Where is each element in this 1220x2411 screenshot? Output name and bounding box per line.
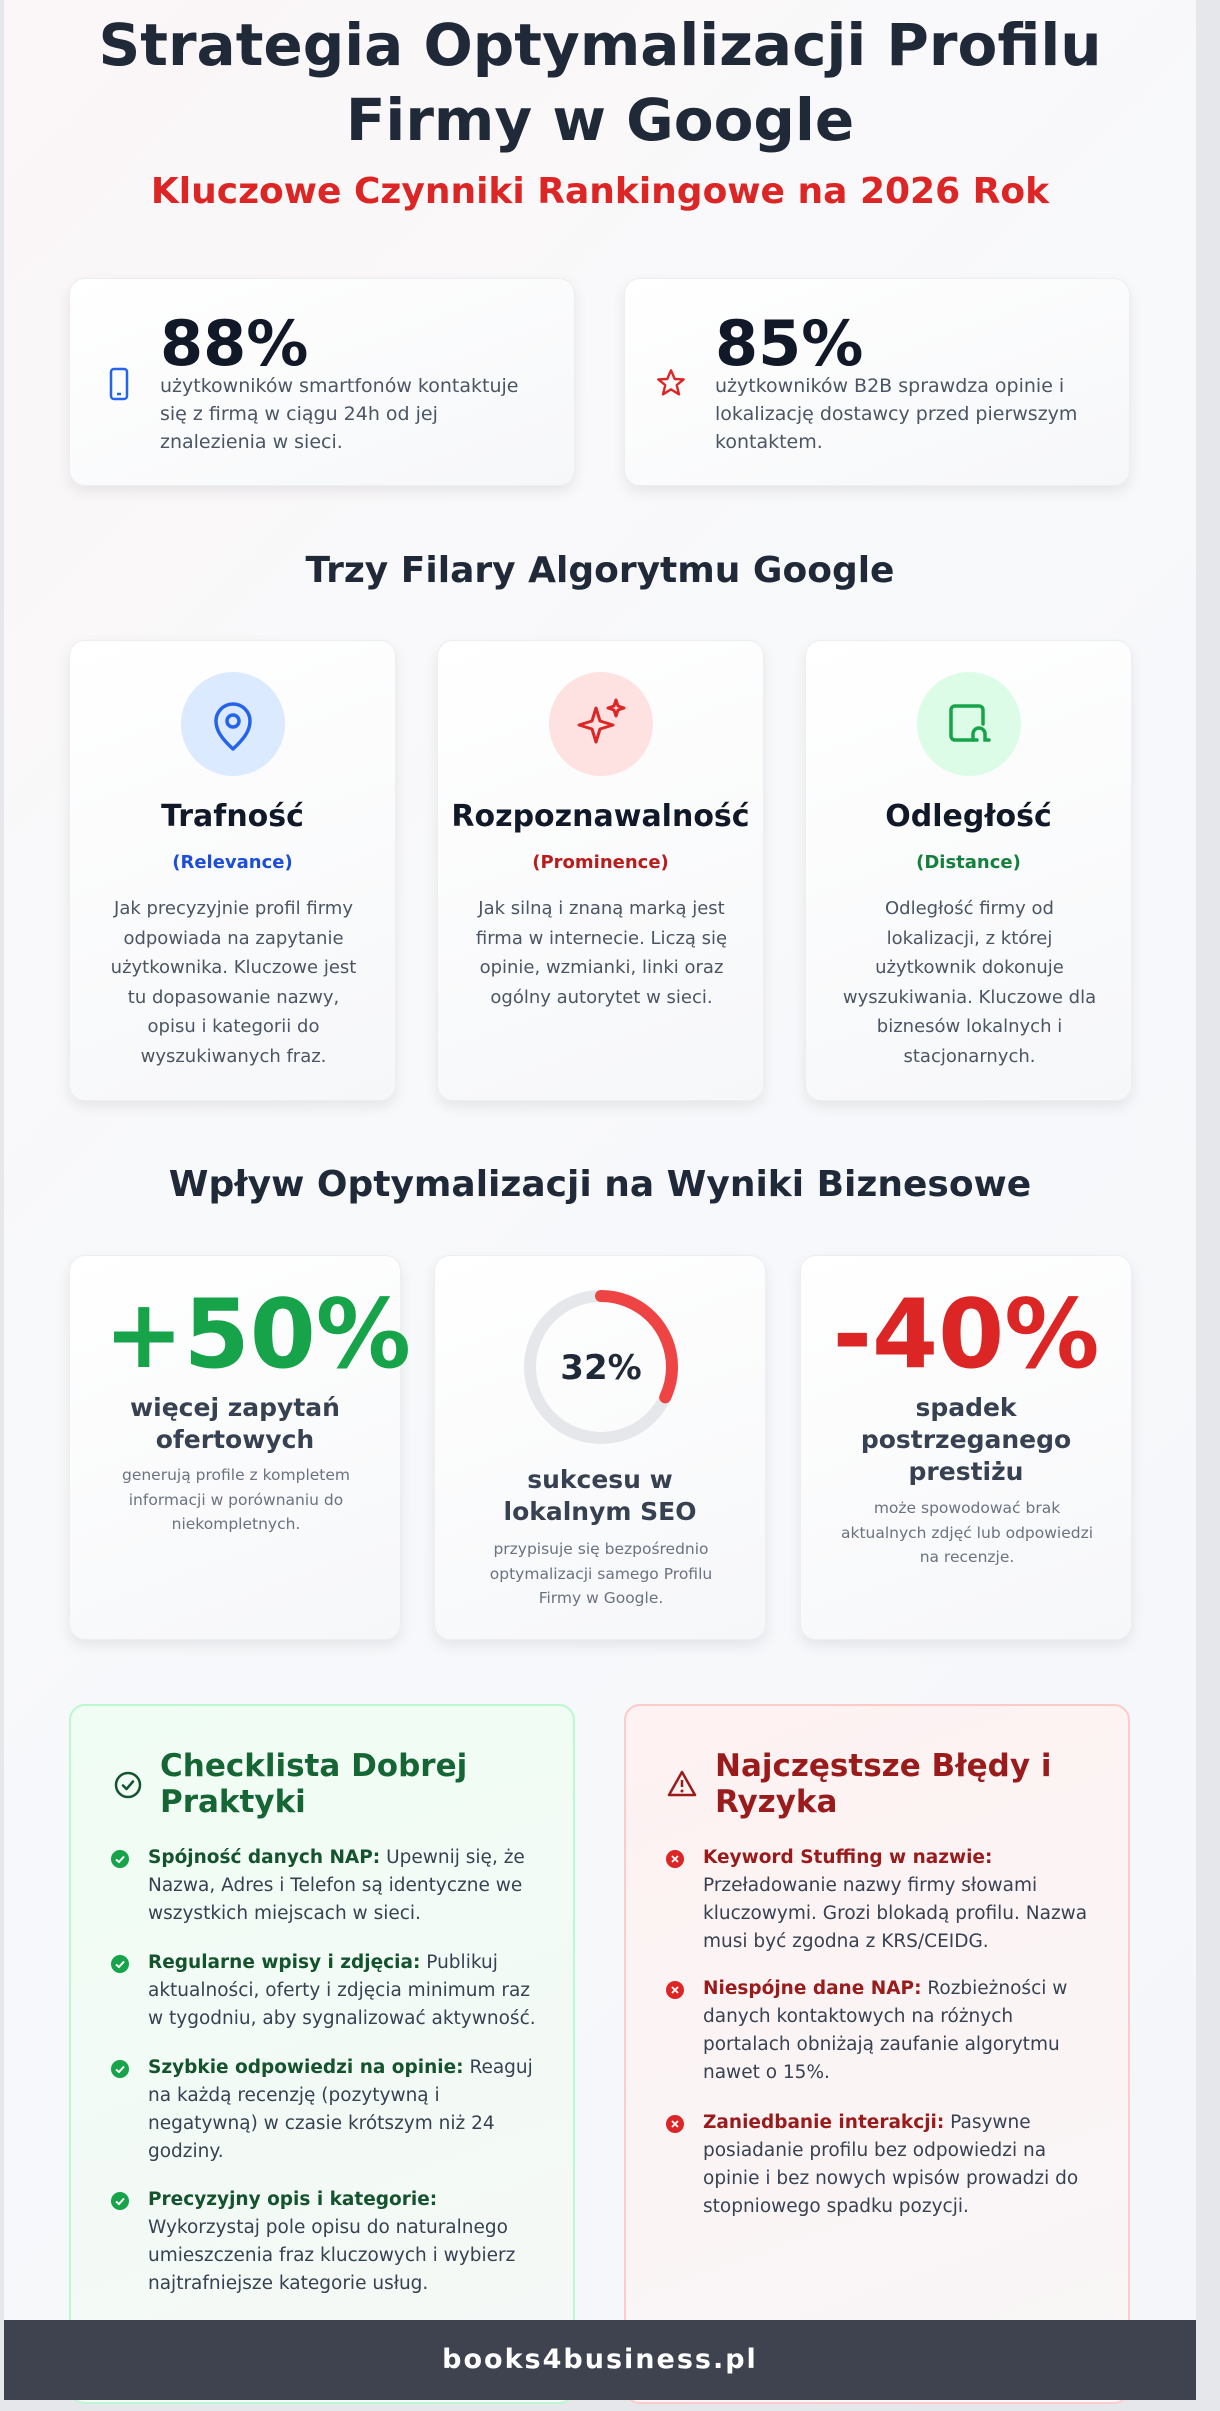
- heading: impact: Wpływ Optymalizacji na Wyniki Biznesowe: [169, 1164, 1031, 1205]
- pillar: Trafność: [69, 640, 396, 1101]
- panel heading: [160, 1748, 467, 1820]
- icon: star: [657, 369, 685, 396]
- subtitle: Kluczowe Czynniki Rankingowe na 2026 Rok: [151, 171, 1049, 212]
- icon: location pin: [181, 672, 285, 776]
- icon: warning: [668, 1770, 696, 1796]
- pillar text: Jak precyzyjnie profil firmy odpowiada na zapytanie użytkownika. Kluczowe jest tu dopasowanie nazwy, opisu i kategorii do wyszukiwanych fraz.: [111, 898, 356, 1066]
- pillar: Rozpoznawalność: [437, 640, 764, 1101]
- icon: distance: [917, 672, 1021, 776]
- pillar subtitle: (Relevance): [172, 852, 293, 873]
- title: Strategia Optymalizacji Profilu: [98, 11, 1102, 79]
- donut chart: 32%: [560, 1348, 642, 1388]
- heading: pillars: Trzy Filary Algorytmu Google: [306, 550, 894, 591]
- label: postrzeganego: [861, 1425, 1071, 1454]
- panel heading: Praktyki: [160, 1784, 306, 1820]
- pillar text: Jak silną i znaną marką jest firma w internecie. Liczą się opinie, wzmianki, linki oraz ogólny autorytet w sieci.: [476, 898, 727, 1008]
- pillar subtitle: (Prominence): [532, 852, 669, 873]
- pillar title: Rozpoznawalność: [451, 799, 750, 834]
- stat text: użytkowników smartfonów kontaktuje się z firmą w ciągu 24h od jej znalezienia w sieci.: [160, 375, 518, 453]
- label: ofertowych: [156, 1425, 314, 1454]
- item 2: Niespójne dane NAP: Rozbieżności w danych kontaktowych na różnych portalach obniżają zaufanie algorytmu nawet o 15%.: [703, 1978, 1067, 2083]
- pillar title: Trafność: [161, 799, 304, 834]
- item 4: [111, 2189, 515, 2294]
- checklist items: [111, 1847, 536, 2294]
- impact card: -40%: [800, 1255, 1132, 1640]
- description: generują profile z kompletem informacji w porównaniu do niekompletnych.: [122, 1466, 350, 1533]
- label: spadek: [915, 1393, 1017, 1422]
- item 1: Keyword Stuffing w nazwie: Przeładowanie nazwy firmy słowami kluczowymi. Grozi blokadą profilu. Nazwa musi być zgodna z KRS/CEIDG.: [703, 1847, 1087, 1952]
- panel: checklist: [69, 1704, 575, 2404]
- title: [98, 11, 1102, 154]
- label: prestiżu: [909, 1457, 1023, 1486]
- item 1: Spójność danych NAP: Upewnij się, że Nazwa, Adres i Telefon są identyczne we wszystkich miejscach w sieci.: [148, 1847, 525, 1924]
- label: [504, 1465, 696, 1526]
- big number: -40%: [833, 1280, 1099, 1390]
- donut chart: [524, 1290, 678, 1444]
- label: sukcesu w: [527, 1465, 673, 1494]
- pillar subtitle: (Distance): [916, 852, 1021, 873]
- stat text: użytkowników B2B sprawdza opinie i lokalizację dostawcy przed pierwszym kontaktem.: [715, 375, 1077, 453]
- description: przypisuje się bezpośrednio optymalizacji samego Profilu Firmy w Google.: [490, 1540, 712, 1607]
- panel heading: Najczęstsze Błędy i: [715, 1748, 1052, 1784]
- stat number: 85%: [715, 307, 863, 380]
- big number: +50%: [104, 1280, 411, 1390]
- item 4: Wykorzystaj pole opisu do naturalnego umieszczenia fraz kluczowych i wybierz najtrafniejsze kategorie usług.: [148, 2217, 515, 2294]
- impact card: 32% donut: [434, 1255, 766, 1640]
- panel heading: Checklista Dobrej: [160, 1748, 467, 1784]
- pillar text: Odległość firmy od: [885, 898, 1054, 919]
- icon: check circle: [114, 1772, 142, 1798]
- item 4: Precyzyjny opis i kategorie:: [148, 2189, 437, 2210]
- item 2: Regularne wpisy i zdjęcia: Publikuj aktualności, oferty i zdjęcia minimum raz w tygodniu, aby sygnalizować aktywność.: [148, 1952, 536, 2029]
- label: lokalnym SEO: [504, 1497, 696, 1526]
- panel: risks: [624, 1704, 1130, 2404]
- item 3: Szybkie odpowiedzi na opinie: Reaguj na każdą recenzję (pozytywną i negatywną) w czasie krótszym niż 24 godziny.: [148, 2057, 533, 2162]
- panel heading: [715, 1748, 1052, 1820]
- stat card: 85%: [624, 278, 1130, 486]
- footer: [4, 2320, 1196, 2400]
- pillar text: lokalizacji, z której użytkownik dokonuje wyszukiwania. Kluczowe dla biznesów lokalnych i stacjonarnych.: [843, 928, 1096, 1066]
- pillar title: Odległość: [885, 799, 1052, 834]
- pillar: Odległość: [805, 640, 1132, 1101]
- label: [130, 1393, 340, 1454]
- stat number: 88%: [160, 307, 308, 380]
- panel heading: Ryzyka: [715, 1784, 837, 1820]
- icon: smartphone: [110, 368, 128, 400]
- description: może spowodować brak aktualnych zdjęć lub odpowiedzi na recenzje.: [841, 1499, 1093, 1566]
- icon: sparkles: [549, 672, 653, 776]
- risk items: [666, 1847, 1087, 2217]
- label: [861, 1393, 1071, 1486]
- stat card: 88%: [69, 278, 575, 486]
- footer: books4business.pl: [442, 2344, 758, 2375]
- item 3: Zaniedbanie interakcji: Pasywne posiadanie profilu bez odpowiedzi na opinie i bez nowych wpisów prowadzi do stopniowego spadku pozycji.: [703, 2112, 1078, 2217]
- impact card: +50%: [69, 1255, 401, 1640]
- label: więcej zapytań: [130, 1393, 340, 1422]
- title: Firmy w Google: [346, 86, 854, 154]
